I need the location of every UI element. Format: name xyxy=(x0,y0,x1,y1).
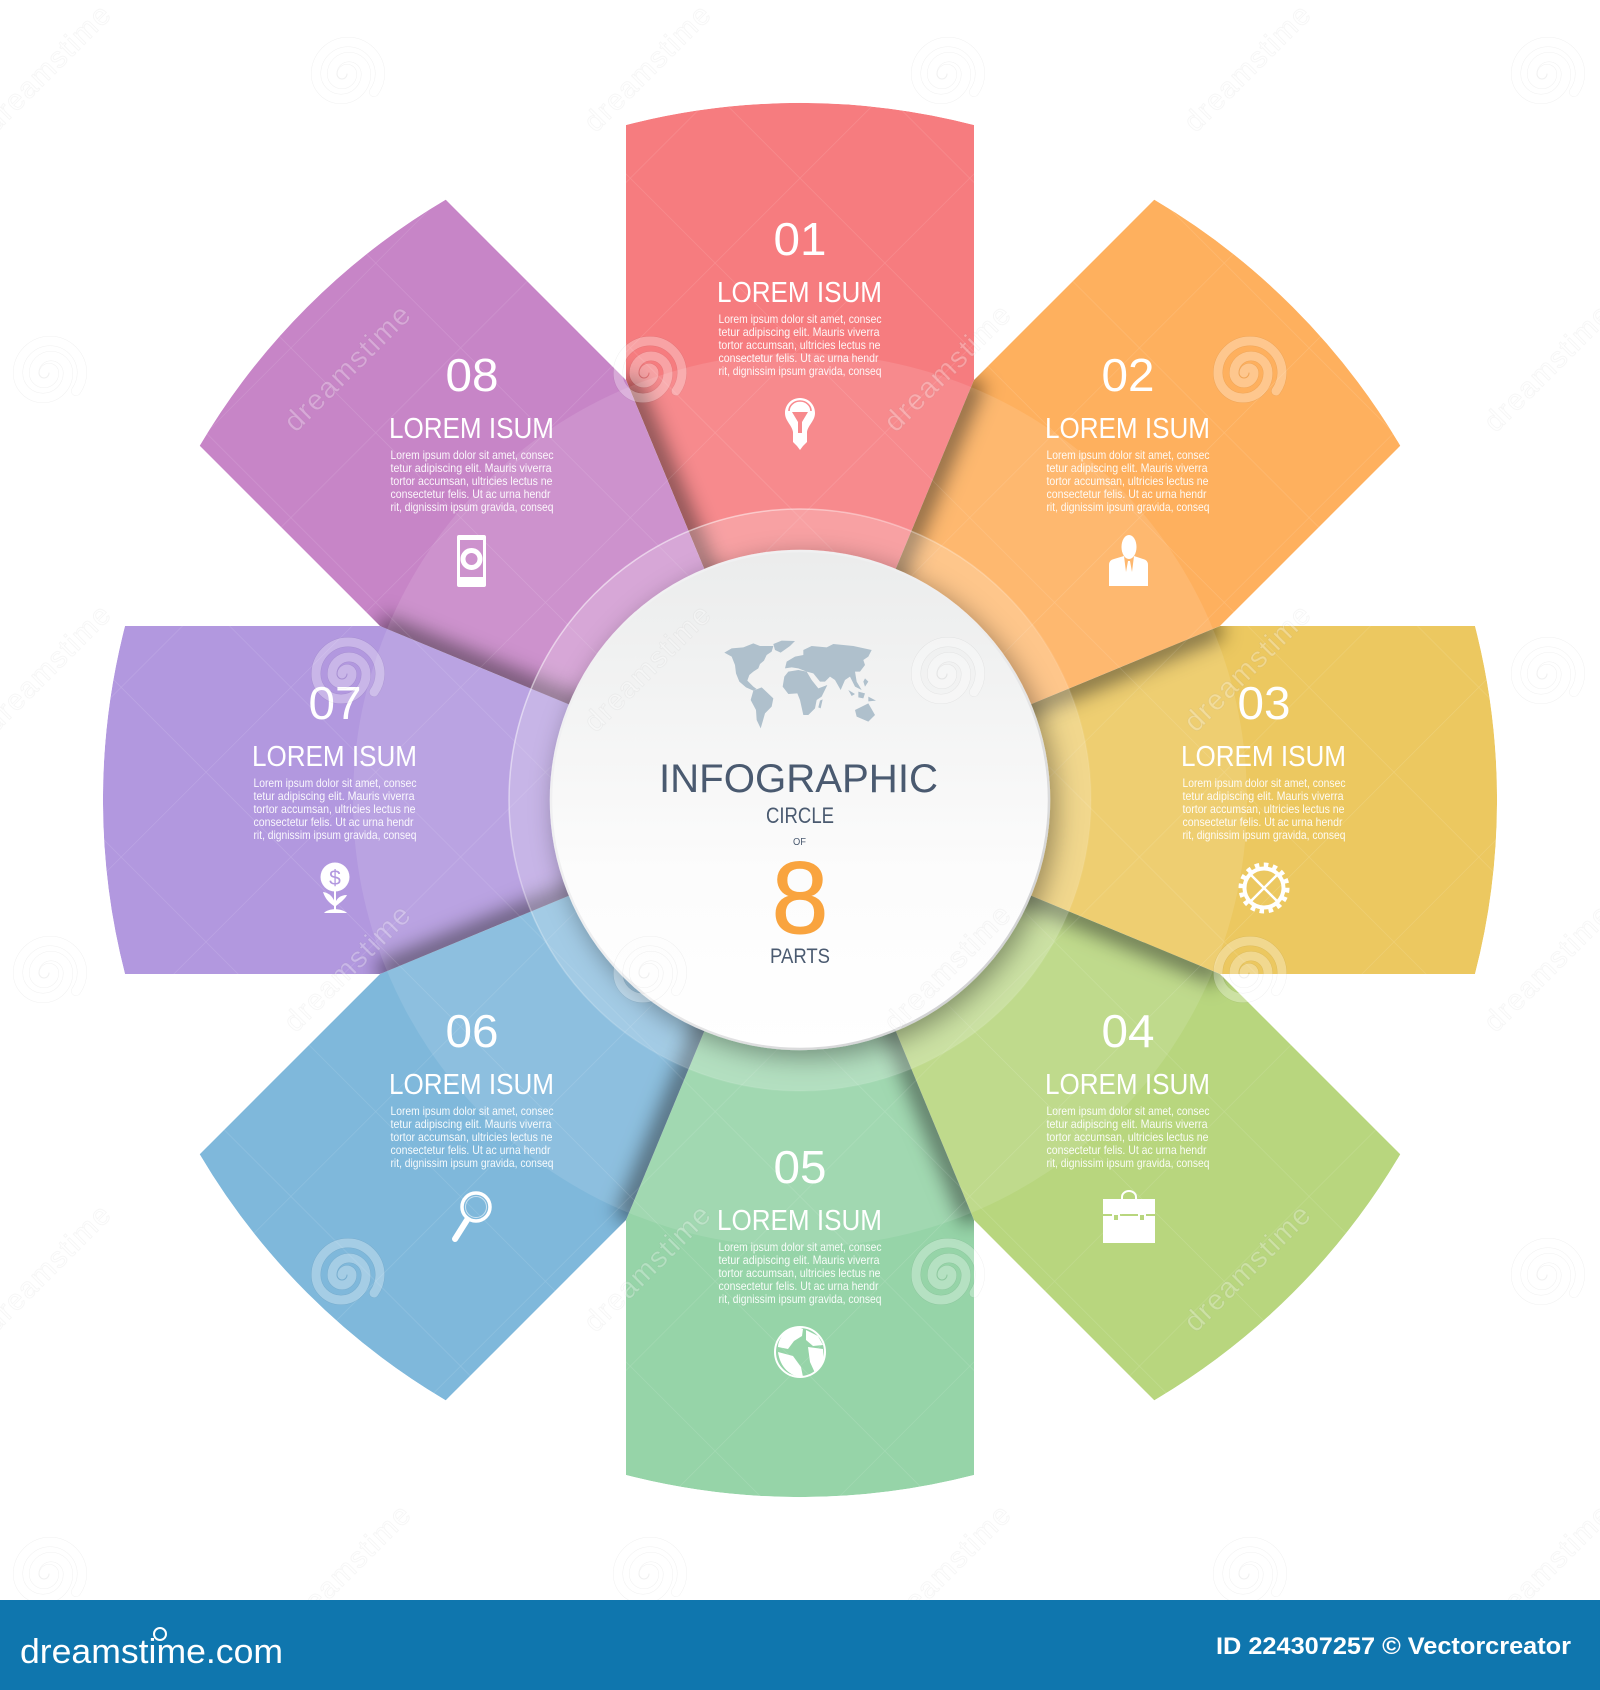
heading 03: LOREM ISUM xyxy=(1181,741,1346,773)
heading 08: LOREM ISUM xyxy=(389,413,554,445)
watermark text: dreamstime xyxy=(578,1199,717,1338)
watermark text: dreamstime xyxy=(1178,1199,1317,1338)
text 07: rit, dignissim ipsum gravida, conseq xyxy=(254,828,416,842)
footer bar xyxy=(0,1600,1600,1690)
text 04: consectetur felis. Ut ac urna hendr xyxy=(1046,1143,1206,1157)
heading 07: LOREM ISUM xyxy=(252,741,417,773)
text 03: tortor accumsan, ultricies lectus ne xyxy=(1182,802,1345,816)
text 06: rit, dignissim ipsum gravida, conseq xyxy=(390,1156,554,1170)
panel 06: blue xyxy=(200,896,704,1400)
text 01: consectetur felis. Ut ac urna hendr xyxy=(718,351,878,365)
text 08: consectetur felis. Ut ac urna hendr xyxy=(390,487,550,501)
text 07: tetur adipiscing elit. Mauris viverra xyxy=(254,789,415,803)
icon: magnifier xyxy=(455,1193,490,1239)
text 01: rit, dignissim ipsum gravida, conseq xyxy=(718,364,882,378)
title: INFOGRAPHIC xyxy=(659,757,938,801)
watermark text: dreamstime xyxy=(278,299,417,438)
text 07: consectetur felis. Ut ac urna hendr xyxy=(254,815,414,829)
number 03: 03 xyxy=(1238,677,1290,729)
label: of: OF xyxy=(793,836,806,848)
text 01 xyxy=(718,312,882,378)
text 02: tetur adipiscing elit. Mauris viverra xyxy=(1046,461,1208,475)
text 06: tortor accumsan, ultricies lectus ne xyxy=(390,1130,553,1144)
number 01: 01 xyxy=(774,213,826,265)
text 05: Lorem ipsum dolor sit amet, consec xyxy=(718,1240,882,1254)
watermark text: dreamstime xyxy=(578,599,717,738)
text 08: rit, dignissim ipsum gravida, conseq xyxy=(390,500,554,514)
big number 8: 8 xyxy=(772,841,828,955)
watermark text: dreamstime xyxy=(578,0,717,138)
text 02: Lorem ipsum dolor sit amet, consec xyxy=(1046,448,1210,462)
footer credit: ID 224307257 © Vectorcreator xyxy=(1216,1633,1571,1660)
text 06: tetur adipiscing elit. Mauris viverra xyxy=(390,1117,552,1131)
icon: money plant: $ xyxy=(329,867,341,890)
icon: briefcase xyxy=(1103,1191,1155,1243)
watermark text: dreamstime xyxy=(1178,599,1317,738)
watermark text: dreamstime xyxy=(878,299,1017,438)
number 07: 07 xyxy=(308,677,362,729)
panel 04: green xyxy=(896,896,1400,1400)
text 05: consectetur felis. Ut ac urna hendr xyxy=(718,1279,878,1293)
text 05: tetur adipiscing elit. Mauris viverra xyxy=(718,1253,880,1267)
text 05 xyxy=(718,1240,882,1306)
panel 08: purple xyxy=(200,200,704,704)
text 04 xyxy=(1046,1104,1210,1170)
text 03: rit, dignissim ipsum gravida, conseq xyxy=(1182,828,1346,842)
watermark text: dreamstime xyxy=(278,1499,417,1638)
icon: globe xyxy=(775,1327,825,1377)
footer logo: dreamstime.com xyxy=(20,1633,283,1671)
heading 04: LOREM ISUM xyxy=(1045,1069,1210,1101)
center circle xyxy=(551,551,1049,1049)
icon: businessman xyxy=(1109,535,1148,586)
heading 05: LOREM ISUM xyxy=(717,1205,882,1237)
text 01: tortor accumsan, ultricies lectus ne xyxy=(718,338,881,352)
watermark text: dreamstime xyxy=(878,899,1017,1038)
world map xyxy=(724,641,876,728)
number 05: 05 xyxy=(774,1141,826,1193)
icon: light bulb xyxy=(785,398,815,450)
number 02: 02 xyxy=(1102,349,1154,401)
heading 01: LOREM ISUM xyxy=(717,277,882,309)
watermark text: dreamstime xyxy=(278,899,417,1038)
text 03: consectetur felis. Ut ac urna hendr xyxy=(1182,815,1342,829)
heading 06: LOREM ISUM xyxy=(389,1069,554,1101)
watermark text: dreamstime xyxy=(1178,0,1317,138)
number 08: 08 xyxy=(446,349,498,401)
text 07 xyxy=(254,776,416,842)
text 01: tetur adipiscing elit. Mauris viverra xyxy=(718,325,880,339)
panel 02: orange xyxy=(896,200,1400,704)
panel 03: yellow xyxy=(1031,626,1497,974)
text 03: tetur adipiscing elit. Mauris viverra xyxy=(1182,789,1344,803)
text 04: Lorem ipsum dolor sit amet, consec xyxy=(1046,1104,1210,1118)
text 06: Lorem ipsum dolor sit amet, consec xyxy=(390,1104,554,1118)
text 06 xyxy=(390,1104,554,1170)
text 02: tortor accumsan, ultricies lectus ne xyxy=(1046,474,1209,488)
icon: smartphone xyxy=(457,535,486,587)
text 08: tortor accumsan, ultricies lectus ne xyxy=(390,474,553,488)
panel 05: mint xyxy=(626,1031,974,1497)
text 04: tetur adipiscing elit. Mauris viverra xyxy=(1046,1117,1208,1131)
text 02 xyxy=(1046,448,1210,514)
number 06: 06 xyxy=(446,1005,498,1057)
text 06: consectetur felis. Ut ac urna hendr xyxy=(390,1143,550,1157)
text 07: tortor accumsan, ultricies lectus ne xyxy=(254,802,416,816)
label: parts: PARTS xyxy=(770,945,830,968)
text 03: Lorem ipsum dolor sit amet, consec xyxy=(1182,776,1346,790)
text 02: consectetur felis. Ut ac urna hendr xyxy=(1046,487,1206,501)
icon: money plant xyxy=(320,862,350,913)
text 04: rit, dignissim ipsum gravida, conseq xyxy=(1046,1156,1210,1170)
text 01: Lorem ipsum dolor sit amet, consec xyxy=(718,312,882,326)
text 08 xyxy=(390,448,554,514)
text 05: rit, dignissim ipsum gravida, conseq xyxy=(718,1292,882,1306)
text 05: tortor accumsan, ultricies lectus ne xyxy=(718,1266,881,1280)
text 07: Lorem ipsum dolor sit amet, consec xyxy=(254,776,416,790)
number 04: 04 xyxy=(1102,1005,1154,1057)
panel 01: red xyxy=(626,103,974,569)
panel 07: violet xyxy=(103,626,569,974)
text 04: tortor accumsan, ultricies lectus ne xyxy=(1046,1130,1209,1144)
text 02: rit, dignissim ipsum gravida, conseq xyxy=(1046,500,1210,514)
heading 02: LOREM ISUM xyxy=(1045,413,1210,445)
subtitle: circle: CIRCLE xyxy=(766,803,834,828)
text 03 xyxy=(1182,776,1346,842)
icon: gear xyxy=(1241,865,1287,911)
text 08: Lorem ipsum dolor sit amet, consec xyxy=(390,448,554,462)
watermark text: dreamstime xyxy=(878,1499,1017,1638)
text 08: tetur adipiscing elit. Mauris viverra xyxy=(390,461,552,475)
